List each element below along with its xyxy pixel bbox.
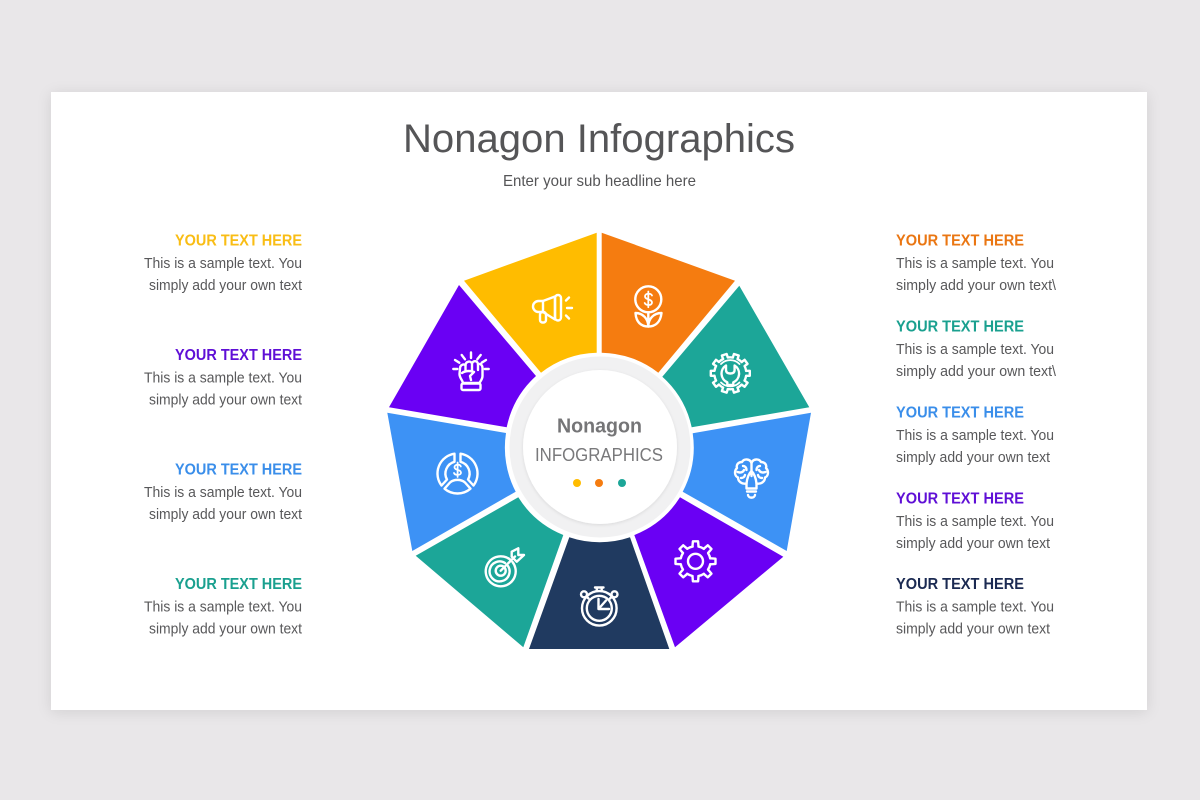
right text block: teal: YOUR TEXT HERE xyxy=(896,318,1024,336)
right text block: orange xyxy=(896,232,1057,294)
icon: cog xyxy=(676,541,716,581)
icon: stopwatch xyxy=(581,588,618,626)
hub title: Nonagon xyxy=(557,416,642,438)
left text block: teal: simply add your own text xyxy=(149,622,302,638)
icon: target with arrow xyxy=(486,548,524,586)
nonagon chart xyxy=(387,233,811,649)
segment: yellow xyxy=(464,233,597,373)
left text block: purple: simply add your own text xyxy=(149,392,302,408)
right text block: navy: simply add your own text xyxy=(896,622,1050,638)
hub inner disc xyxy=(523,370,677,524)
right text block: purple: YOUR TEXT HERE xyxy=(896,490,1024,508)
segment: purple lower right xyxy=(634,497,783,647)
hub subtitle: INFOGRAPHICS xyxy=(535,445,663,465)
right text block: orange: YOUR TEXT HERE xyxy=(896,232,1024,250)
right text block: teal xyxy=(896,318,1057,380)
left text block: yellow xyxy=(144,232,302,294)
segment: teal lower left xyxy=(416,497,563,647)
segment: blue right xyxy=(683,413,811,551)
left text block: blue: YOUR TEXT HERE xyxy=(175,462,302,478)
right text block: navy: This is a sample text. You xyxy=(896,600,1054,616)
segment: teal upper right xyxy=(662,286,809,427)
segment: orange xyxy=(602,233,735,373)
right text block: teal: simply add your own text\ xyxy=(896,364,1057,380)
right text block: navy: YOUR TEXT HERE xyxy=(896,576,1024,593)
right text block: navy xyxy=(896,576,1054,638)
left text block: blue: This is a sample text. You xyxy=(144,485,302,501)
left text block: purple: YOUR TEXT HERE xyxy=(175,347,302,364)
segment: blue left xyxy=(387,413,516,551)
left text block: blue xyxy=(144,462,302,523)
segment: purple upper left xyxy=(389,285,536,427)
icon: megaphone xyxy=(533,295,572,322)
left text block: teal: YOUR TEXT HERE xyxy=(175,576,302,593)
icon: dollar flower xyxy=(635,286,662,326)
panel: white slide card xyxy=(51,92,1147,710)
right text block: blue xyxy=(896,404,1054,466)
left text block: blue: simply add your own text xyxy=(149,507,302,523)
right text block: purple: simply add your own text xyxy=(896,536,1050,552)
icon: raised fist xyxy=(453,352,489,390)
right text block: orange: simply add your own text\ xyxy=(896,278,1057,294)
right text block: purple: This is a sample text. You xyxy=(896,514,1054,530)
center hub xyxy=(510,356,690,538)
icon: dollar person ring xyxy=(437,454,478,494)
segment: navy bottom xyxy=(529,537,669,649)
title: Nonagon Infographics xyxy=(403,117,795,161)
right text block: orange: This is a sample text. You xyxy=(896,256,1054,272)
right text block: blue: YOUR TEXT HERE xyxy=(896,404,1024,422)
icon: brain bulb xyxy=(735,459,768,498)
right text block: blue: This is a sample text. You xyxy=(896,428,1054,444)
icon: wrench gear xyxy=(711,354,750,393)
hub outer ring xyxy=(510,356,690,538)
right text block: blue: simply add your own text xyxy=(896,450,1050,466)
left text block: yellow: YOUR TEXT HERE xyxy=(175,232,302,250)
subtitle: Enter your sub headline here xyxy=(503,173,696,190)
right text block: teal: This is a sample text. You xyxy=(896,342,1054,358)
left text block: purple xyxy=(144,347,302,408)
left text block: yellow: simply add your own text xyxy=(149,278,302,294)
left text block: teal: This is a sample text. You xyxy=(144,600,302,616)
hub dots xyxy=(573,479,626,487)
left text block: purple: This is a sample text. You xyxy=(144,370,302,386)
right text block: purple xyxy=(896,490,1054,552)
left text block: yellow: This is a sample text. You xyxy=(144,256,302,272)
left text block: teal xyxy=(144,576,302,638)
